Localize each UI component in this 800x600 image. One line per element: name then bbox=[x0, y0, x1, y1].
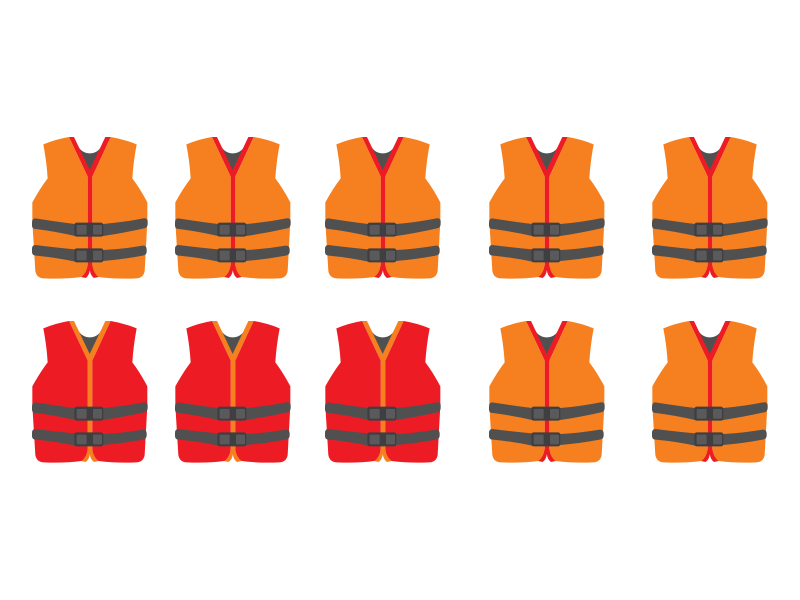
icon: orange life vest, row 1 column 5 bbox=[652, 137, 768, 279]
icon: red life vest, row 2 column 1 bbox=[32, 321, 148, 463]
icon: orange life vest, row 1 column 2 bbox=[175, 137, 291, 279]
icon: orange life vest, row 2 column 4 bbox=[489, 321, 605, 463]
icon: red life vest, row 2 column 3 bbox=[325, 321, 441, 463]
icon: orange life vest, row 1 column 1 bbox=[32, 137, 148, 279]
icon: orange life vest, row 1 column 3 bbox=[325, 137, 441, 279]
icon: orange life vest, row 2 column 5 bbox=[652, 321, 768, 463]
icon: red life vest, row 2 column 2 bbox=[175, 321, 291, 463]
icon: orange life vest, row 1 column 4 bbox=[489, 137, 605, 279]
